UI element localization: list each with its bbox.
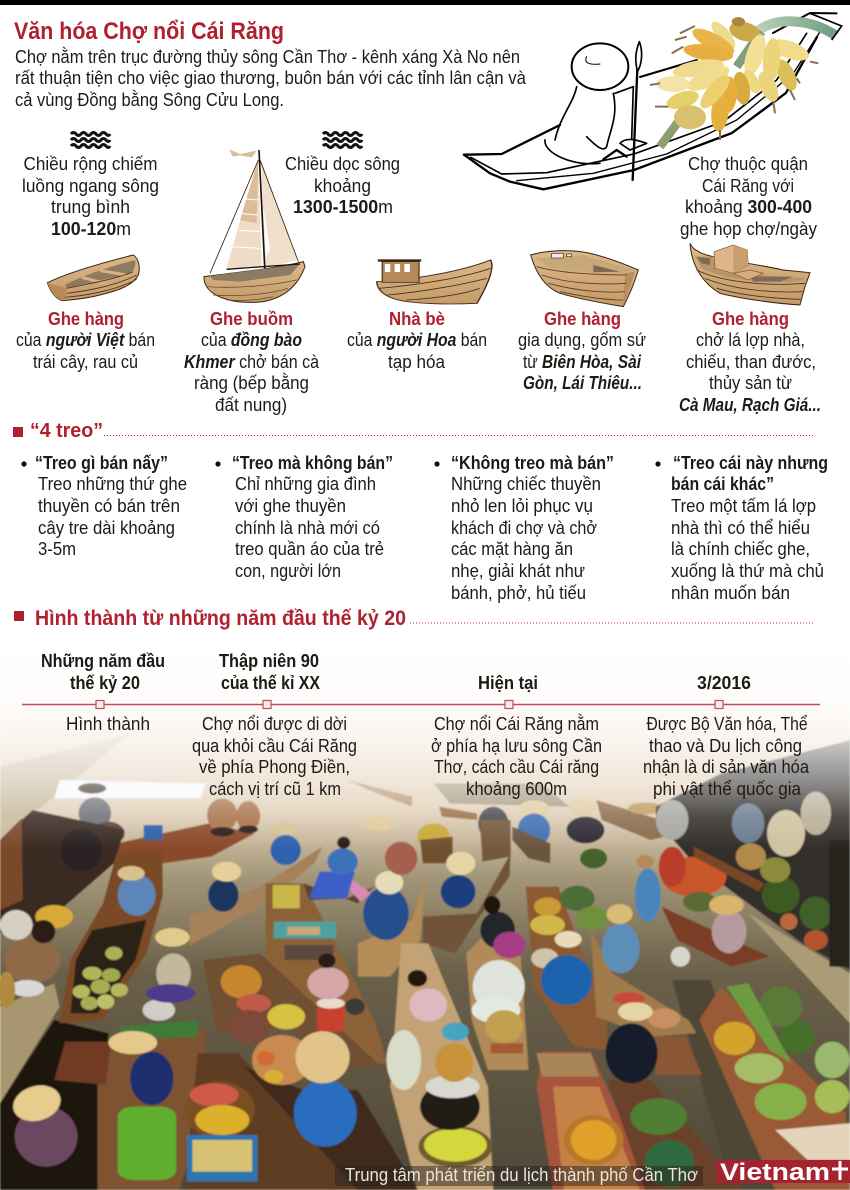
timeline item: March 2016: nhận là di sản văn hóa bbox=[643, 757, 810, 777]
stat: river length: Chiều dọc sông bbox=[285, 154, 400, 174]
column: khong treo ma ban: Những chiếc thuyền bbox=[451, 474, 601, 494]
column: treo gi ban nay: thuyền có bán trên bbox=[38, 496, 180, 516]
column: khong treo ma ban: nhẹ, giải khát như bbox=[451, 561, 585, 581]
stat: river length: khoảng bbox=[314, 176, 371, 196]
column: treo gi ban nay: “Treo gì bán nấy” bbox=[35, 453, 168, 473]
timeline item: early 20th century: Những năm đầu bbox=[41, 651, 165, 671]
boat caption: ghe hang gia dung: gia dụng, gốm sứ bbox=[518, 330, 646, 350]
timeline item: present: Hiện tại bbox=[478, 673, 538, 693]
timeline item: early 20th century: Hình thành bbox=[66, 714, 150, 734]
boat caption: ghe hang nguoi Viet: của người Việt bán bbox=[16, 330, 155, 350]
column: treo ma khong ban bbox=[215, 453, 393, 581]
timeline item: March 2016 bbox=[643, 673, 810, 799]
source credit: Trung tâm phát triển du lịch thành phố Cần Thơ bbox=[345, 1165, 698, 1185]
stat: river width: Chiều rộng chiếm bbox=[24, 154, 158, 174]
column: treo cai nay nhung ban cai khac: nhà thì có thể hiểu bbox=[671, 518, 810, 538]
timeline item: 1990s bbox=[192, 651, 357, 799]
boat caption: ghe hang la lop: Cà Mau, Rạch Giá... bbox=[679, 395, 821, 415]
column: treo ma khong ban: “Treo mà không bán” bbox=[232, 453, 393, 473]
icon: covered merchant boat bbox=[531, 251, 638, 307]
boat caption: ghe hang la lop: chiếu, than đước, bbox=[686, 352, 816, 372]
boat caption: ghe buom bbox=[184, 309, 320, 415]
heading: 4 treo bbox=[13, 420, 815, 442]
timeline item: March 2016: phi vật thể quốc gia bbox=[653, 779, 802, 799]
boat caption: ghe hang la lop bbox=[679, 309, 821, 415]
timeline item: present: khoảng 600m bbox=[466, 779, 567, 799]
boat caption: ghe buom: Khmer chở bán cà bbox=[184, 352, 320, 372]
boat caption: ghe buom: Ghe buồm bbox=[210, 309, 293, 329]
title: Văn hóa Chợ nổi Cái Răng bbox=[14, 18, 284, 45]
column: khong treo ma ban: “Không treo mà bán” bbox=[451, 453, 614, 473]
upper pale scene bbox=[0, 733, 694, 863]
icon: houseboat bbox=[377, 259, 492, 304]
icon: water waves left bbox=[71, 132, 110, 148]
column: khong treo ma ban: bánh, phở, hủ tiếu bbox=[451, 583, 586, 603]
timeline item: early 20th century: thế kỷ 20 bbox=[70, 673, 140, 693]
intro text: Chợ nằm trên trục đường thủy sông Cần Thơ - kênh xáng Xà No nên bbox=[15, 46, 520, 67]
heading: 4 treo: “4 treo” bbox=[30, 420, 103, 442]
timeline item: 1990s: Chợ nổi được di dời bbox=[202, 714, 347, 734]
boat caption: nha be bbox=[347, 309, 487, 372]
column: khong treo ma ban: các mặt hàng ăn bbox=[451, 539, 573, 559]
logo: Vietnam+ bbox=[716, 1159, 850, 1186]
timeline item: present: Chợ nổi Cái Răng nằm bbox=[434, 713, 599, 734]
boat caption: ghe buom: ràng (bếp bằng bbox=[194, 372, 309, 393]
column: treo ma khong ban: Chỉ những gia đình bbox=[235, 474, 376, 494]
column: treo gi ban nay: 3-5m bbox=[38, 539, 76, 559]
heading: hinh thanh bbox=[14, 607, 815, 630]
column: treo cai nay nhung ban cai khac: xuống là thứ mà chủ bbox=[671, 561, 824, 581]
timeline item: present: Thơ, cách cầu Cái răng bbox=[434, 757, 599, 777]
stat: river width: 100-120m bbox=[51, 219, 131, 239]
boat caption: ghe hang la lop: chở lá lợp nhà, bbox=[696, 330, 805, 350]
intro text: cả vùng Đồng bằng Sông Cửu Long. bbox=[15, 89, 284, 110]
boat caption: nha be: tạp hóa bbox=[388, 352, 446, 372]
boat caption: ghe hang la lop: Ghe hàng bbox=[712, 309, 789, 329]
timeline axis bbox=[22, 700, 820, 708]
column: khong treo ma ban: nhỏ len lỏi phục vụ bbox=[451, 496, 593, 516]
intro text bbox=[15, 46, 527, 110]
heading: hinh thanh: Hình thành từ những năm đầu thế kỷ 20 bbox=[35, 607, 406, 630]
boat caption: ghe hang gia dung bbox=[518, 309, 646, 393]
column: treo gi ban nay: Treo những thứ ghe bbox=[38, 474, 187, 494]
timeline item: March 2016: 3/2016 bbox=[697, 673, 751, 693]
column: khong treo ma ban bbox=[434, 453, 614, 603]
timeline item: 1990s: Thập niên 90 bbox=[219, 651, 319, 671]
column: treo cai nay nhung ban cai khac: “Treo cái này nhưng bbox=[673, 453, 828, 473]
boat caption: ghe buom: đất nung) bbox=[215, 395, 287, 415]
timeline item: March 2016: thao và Du lịch công bbox=[649, 736, 802, 756]
timeline item: present: ở phía hạ lưu sông Cần bbox=[431, 736, 602, 756]
stat: boats per day: Cái Răng với bbox=[702, 176, 794, 196]
top black bar bbox=[0, 0, 850, 5]
stat: river length bbox=[285, 154, 400, 217]
timeline item: present bbox=[431, 673, 602, 799]
stat: boats per day: ghe họp chợ/ngày bbox=[680, 219, 817, 239]
timeline item: 1990s: cách vị trí cũ 1 km bbox=[209, 779, 341, 799]
boat caption: ghe hang nguoi Viet bbox=[16, 309, 155, 372]
icon: water waves middle bbox=[323, 132, 362, 148]
boat caption: ghe hang la lop: thủy sản từ bbox=[709, 373, 792, 393]
stat: boats per day bbox=[680, 154, 817, 239]
column: treo cai nay nhung ban cai khac bbox=[655, 453, 828, 603]
boat caption: ghe buom: của đồng bào bbox=[201, 330, 302, 350]
column: treo ma khong ban: chính là nhà mới có bbox=[235, 518, 380, 538]
boat caption: ghe hang nguoi Viet: trái cây, rau củ bbox=[33, 352, 138, 372]
boat caption: ghe hang gia dung: Gòn, Lái Thiêu... bbox=[523, 373, 642, 393]
icon: sailing boat bbox=[204, 149, 305, 302]
stat: boats per day: khoảng 300-400 bbox=[685, 197, 812, 217]
boat caption: ghe hang gia dung: từ Biên Hòa, Sài bbox=[523, 352, 642, 372]
boats bbox=[54, 820, 850, 1190]
stat: river width: luồng ngang sông bbox=[22, 176, 159, 196]
timeline item: 1990s: về phía Phong Điền, bbox=[199, 757, 350, 777]
column: treo gi ban nay bbox=[21, 453, 187, 559]
column: treo cai nay nhung ban cai khac: nhân muốn bán bbox=[671, 583, 790, 603]
icon: rowing boat bbox=[47, 255, 139, 301]
goods: coconuts and fruit bbox=[35, 872, 850, 1187]
boat caption: ghe hang gia dung: Ghe hàng bbox=[544, 309, 621, 329]
intro text: rất thuận tiện cho việc giao thương, buôn bán với các tỉnh lân cận và bbox=[15, 68, 527, 88]
column: treo cai nay nhung ban cai khac: Treo một tấm lá lợp bbox=[671, 496, 816, 516]
column: treo ma khong ban: treo quần áo của trẻ bbox=[235, 539, 384, 559]
dark corners and docks bbox=[0, 740, 850, 1190]
stat: river width bbox=[22, 154, 159, 239]
stat: river length: 1300-1500m bbox=[293, 197, 393, 217]
column: khong treo ma ban: khách đi chợ và chở bbox=[451, 518, 597, 538]
stat: boats per day: Chợ thuộc quận bbox=[688, 154, 808, 174]
boat caption: nha be: của người Hoa bán bbox=[347, 330, 487, 350]
boat caption: ghe hang nguoi Viet: Ghe hàng bbox=[48, 309, 124, 329]
logo: Vietnam+: Vietnam bbox=[720, 1159, 830, 1186]
icon: cargo boat bbox=[690, 243, 810, 305]
timeline item: March 2016: Được Bộ Văn hóa, Thể bbox=[646, 714, 808, 734]
banana bunch bbox=[650, 13, 842, 147]
photo: floating market bbox=[0, 648, 850, 1190]
column: treo gi ban nay: cây tre dài khoảng bbox=[38, 518, 175, 538]
timeline item: 1990s: của thế kỉ XX bbox=[221, 673, 320, 693]
vendors: hats and bodies bbox=[0, 822, 746, 1167]
column: treo cai nay nhung ban cai khac: bán cái khác” bbox=[671, 474, 774, 494]
timeline item: 1990s: qua khỏi cầu Cái Răng bbox=[192, 736, 357, 756]
column: treo cai nay nhung ban cai khac: là chính chiếc ghe, bbox=[671, 539, 810, 559]
timeline item: early 20th century bbox=[41, 651, 165, 734]
boat caption: nha be: Nhà bè bbox=[389, 309, 445, 329]
column: treo ma khong ban: với ghe thuyền bbox=[235, 496, 346, 516]
right-bank crowd, plants and pots bbox=[580, 792, 850, 967]
stat: river width: trung bình bbox=[51, 197, 130, 217]
column: treo ma khong ban: con, người lớn bbox=[235, 561, 341, 581]
icon: boat sketch with banana bunch bbox=[464, 13, 842, 189]
boat hull outline and rower bbox=[464, 13, 837, 189]
